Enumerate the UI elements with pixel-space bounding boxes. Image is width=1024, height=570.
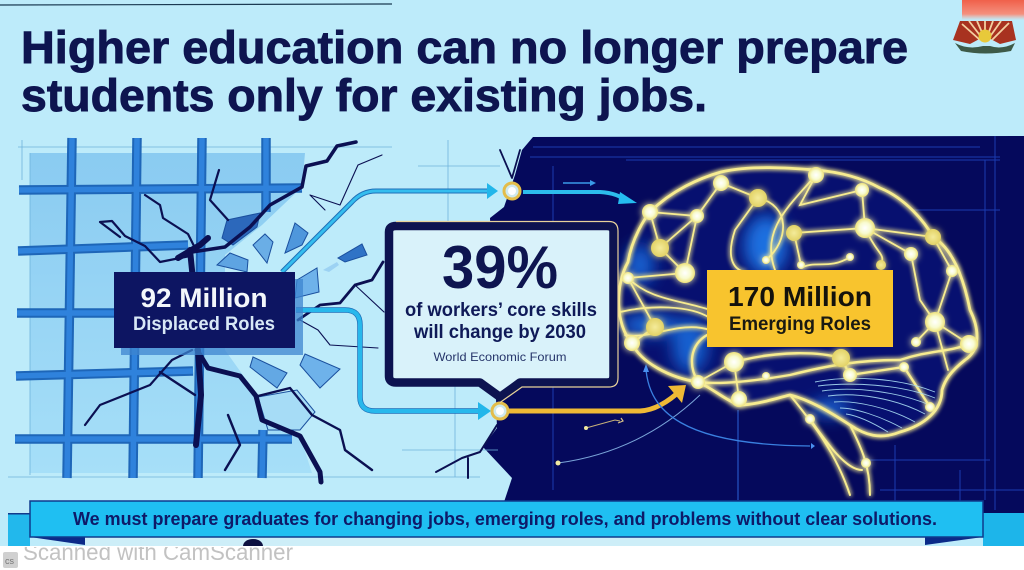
left panel: cracked blue grid	[8, 138, 520, 482]
callout bubble	[389, 226, 614, 397]
interior glow	[622, 215, 850, 416]
institution logo	[953, 0, 1024, 54]
junction node top	[504, 183, 520, 199]
flow arrow: displaced to top node	[282, 183, 498, 272]
callout: 39 percent	[389, 222, 618, 402]
takeaway text: We must prepare graduates for changing jobs, emerging roles, and problems without clear solutions.	[73, 508, 937, 529]
grid cells tint	[30, 153, 312, 473]
label: 170 million emerging roles: Emerging Roles	[729, 313, 871, 335]
flow arrow: bottom node to brain	[506, 364, 815, 466]
scanner watermark	[3, 547, 293, 568]
bottom white margin	[0, 546, 1024, 570]
label: 170 million emerging roles	[707, 270, 893, 347]
right panel: dark blueprint field	[483, 136, 1024, 513]
brain nodes	[622, 167, 978, 468]
cracks	[85, 142, 520, 482]
big number: 39%	[442, 234, 558, 301]
brain body	[619, 168, 977, 436]
scanner watermark: Scanned with CamScanner	[23, 539, 293, 565]
right panel blueprint lines	[530, 136, 1024, 510]
label: 170 million emerging roles: 170 Million	[728, 281, 872, 312]
junction node bottom	[492, 403, 508, 419]
label: 92 million displaced roles	[114, 272, 303, 355]
flow arrow: top node to brain	[523, 180, 637, 204]
brain illustration	[619, 167, 978, 495]
flow arrow: displaced to bottom node	[296, 310, 491, 420]
scanner watermark: cs	[5, 556, 14, 566]
cerebellum stripes	[815, 378, 935, 432]
callout text: of workers’ core skills	[405, 299, 597, 321]
top rule	[0, 4, 392, 5]
title: Higher education can no longer prepare	[21, 22, 908, 73]
source: World Economic Forum	[434, 350, 566, 364]
label: 92 million displaced roles: Displaced Roles	[133, 314, 275, 335]
bottom ribbon	[8, 501, 1024, 546]
wall shards	[217, 213, 367, 430]
neural wires	[619, 168, 977, 495]
label: 92 million displaced roles: 92 Million	[140, 283, 268, 313]
title	[21, 22, 908, 121]
title: students only for existing jobs.	[21, 70, 707, 121]
callout: 39 percent: will change by 2030	[413, 321, 586, 343]
grid bars	[15, 138, 302, 478]
